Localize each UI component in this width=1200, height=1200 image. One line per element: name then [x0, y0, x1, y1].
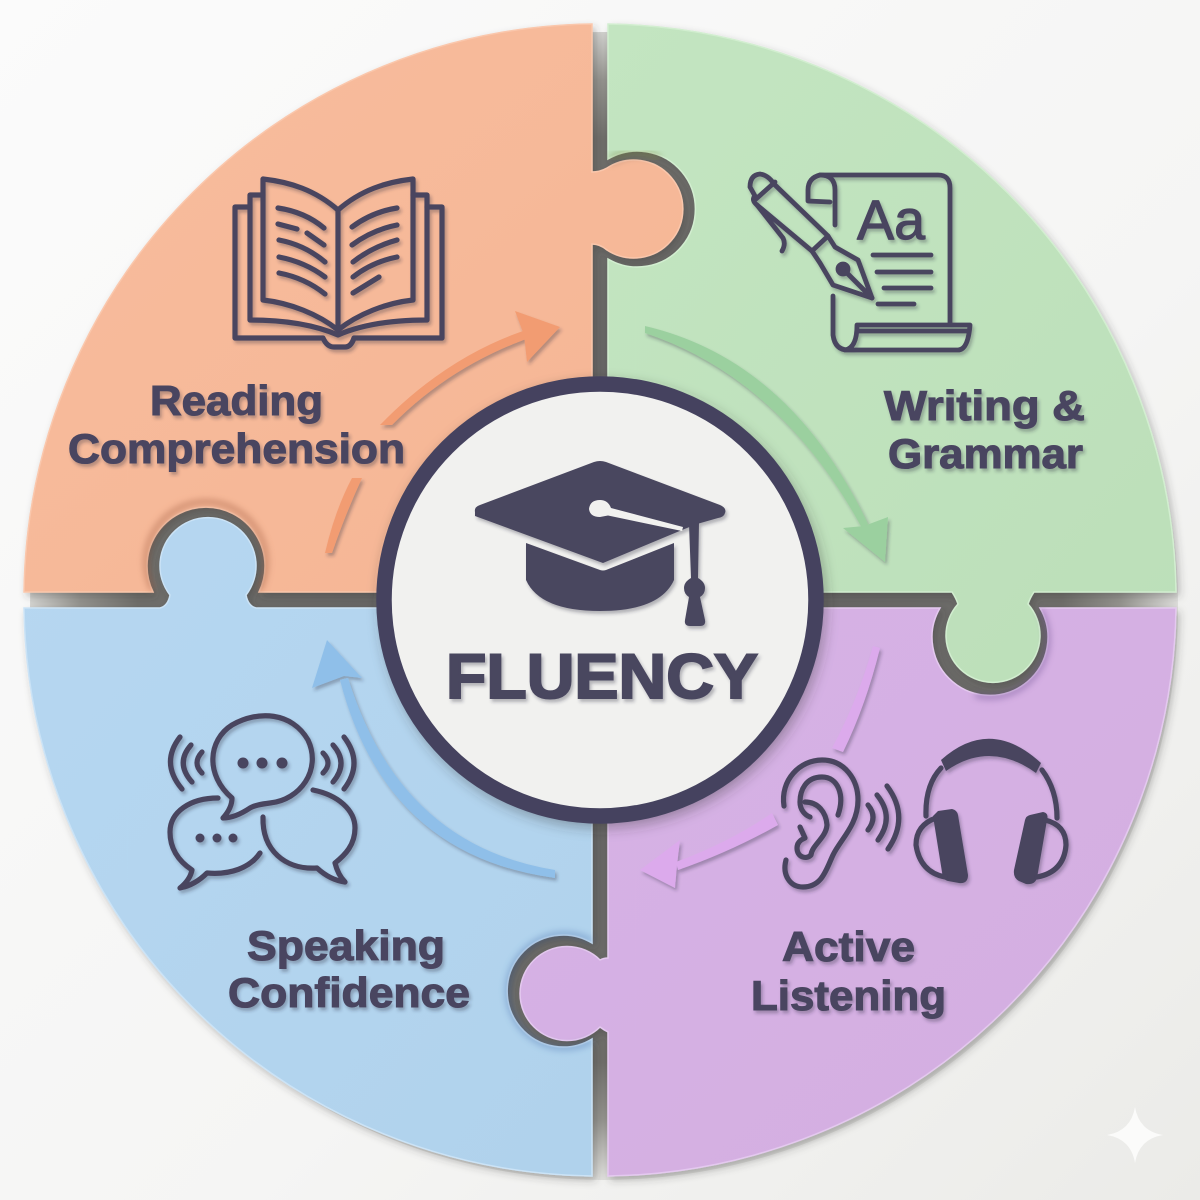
icon: headphones: [916, 739, 1066, 884]
notch shading: purple: [975, 610, 1048, 697]
arrow: orange: [325, 311, 560, 553]
icon: speech bubbles: [170, 716, 355, 888]
icon: open book: [235, 179, 442, 347]
label: Writing & Grammar: Writing &: [884, 382, 1085, 429]
icon: sparkle watermark: [1107, 1107, 1163, 1163]
notch shading: orange: [146, 502, 266, 590]
panel: speaking confidence: [24, 518, 592, 1176]
label: Reading Comprehension: Reading: [150, 377, 323, 424]
label: Speaking Confidence: Speaking: [247, 922, 445, 969]
puzzle piece: green: [608, 24, 1176, 682]
ring and white disc: [384, 384, 816, 816]
icon: scroll and fountain pen: [750, 174, 970, 350]
label: Active Listening: Listening: [751, 972, 946, 1019]
center badge: [384, 384, 816, 816]
arrow: purple: [640, 646, 880, 888]
label: Writing & Grammar: Grammar: [888, 430, 1083, 477]
icon: graduation cap: [475, 461, 725, 626]
puzzle piece: orange: [24, 24, 683, 592]
label: Writing & Grammar: [884, 382, 1085, 477]
arrow: blue: [312, 640, 555, 878]
label: Speaking Confidence: Confidence: [228, 969, 470, 1016]
notch shading: blue: [508, 934, 592, 1048]
notch shading: green: [610, 152, 660, 158]
panel: reading comprehension: [24, 24, 683, 592]
puzzle piece: blue: [24, 518, 592, 1176]
title: FLUENCY: FLUENCY: [446, 642, 758, 712]
text: Aa: Aa: [857, 188, 926, 251]
arrow: green: [645, 326, 888, 562]
label: Speaking Confidence: [228, 922, 470, 1016]
icon: ear and sound waves: [783, 760, 899, 887]
label: Active Listening: [751, 923, 946, 1019]
label: Reading Comprehension: Comprehension: [68, 425, 405, 472]
label: Active Listening: Active: [782, 923, 915, 970]
puzzle piece: purple: [520, 608, 1176, 1176]
panel: writing and grammar: [608, 24, 1176, 682]
panel: active listening: [520, 608, 1176, 1176]
label: Reading Comprehension: [68, 377, 405, 472]
